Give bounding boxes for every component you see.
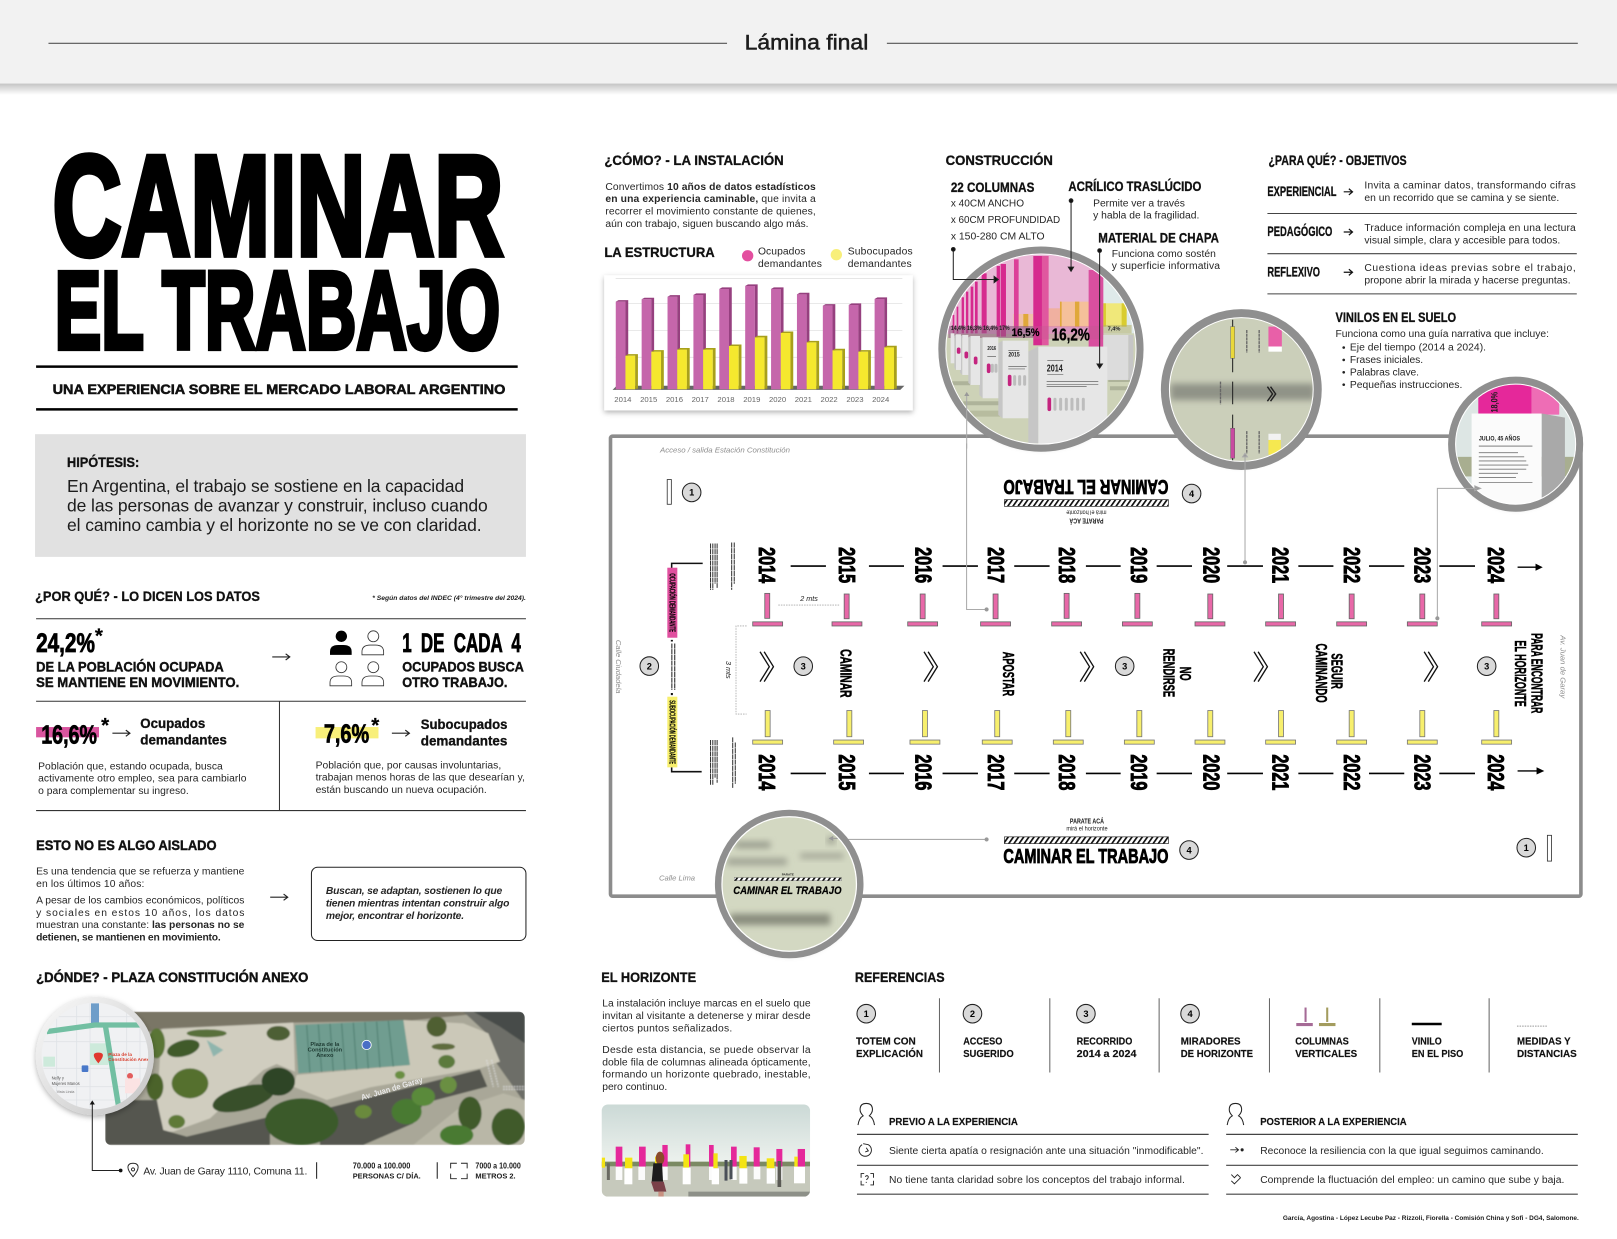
chart year labels: 2020: [769, 395, 786, 404]
mirador top: [1003, 475, 1168, 526]
stat: 24,2%: SE MANTIENE EN MOVIMIENTO.: [36, 675, 239, 690]
stat: metros: METROS 2.: [475, 1172, 516, 1181]
chart year labels: 2021: [795, 395, 812, 404]
chart year labels: 2019: [743, 395, 760, 404]
chart year labels: 2014: [614, 395, 632, 404]
heading: estructura: LA ESTRUCTURA: [604, 245, 715, 260]
stat: 7,6% subocupados: Subocupados: [421, 717, 507, 732]
measure: 3 mts: 3 mts: [724, 661, 733, 679]
panel: como: [604, 153, 913, 410]
panel: posterior: Reconoce la resiliencia con la que igual seguimos caminando.: [1260, 1146, 1544, 1157]
timeline top: years: 2020: [1198, 547, 1224, 583]
mirador bottom: PARATE ACÁ: [1070, 816, 1104, 825]
keywords: EL HORIZONTE: [1511, 640, 1528, 707]
circle: horizon mark detail: PARATE: [782, 873, 794, 877]
heading: referencias: REFERENCIAS: [855, 970, 945, 985]
panel: el horizonte: pero continuo.: [602, 1082, 667, 1093]
panel: esto no es algo aislado: en los últimos 10 años:: [36, 879, 144, 890]
stat: 16,6% ocupados: activamente otro empleo, sea para cambiarlo: [38, 774, 247, 785]
ref 4: [1181, 1004, 1253, 1060]
street label: estacion: Acceso / salida Estación Constitución: [659, 446, 790, 455]
panel: esto no es algo aislado: Es una tendencia que se refuerza y mantiene: [36, 867, 245, 878]
ref 7: measures: DISTANCIAS: [1517, 1049, 1577, 1060]
panel: el horizonte: La instalación incluye marcas en el suelo que: [602, 999, 811, 1010]
panel: vinilos: Eje del tiempo (2014 a 2024).: [1350, 343, 1486, 354]
left bracket: data strips: OCUPACIÓN DEMANDANTE: [667, 573, 678, 632]
text: acrilico: ACRÍLICO TRASLÚCIDO: [1068, 179, 1201, 194]
stat: personas: [353, 1161, 421, 1181]
marker 3 b: 3: [1122, 661, 1127, 671]
circle: columns render: 2016: [987, 346, 996, 352]
panel: vinilos: Pequeñas instrucciones.: [1350, 380, 1462, 391]
panel: esto no es algo aislado: A pesar de los cambios económicos, políticos: [36, 895, 244, 906]
stat: 7,6% subocupados: *: [371, 714, 379, 737]
aerial photo: Plaza de la: [310, 1042, 340, 1048]
marker 1 bottom: 1: [1524, 843, 1529, 853]
icon: four people: [330, 631, 384, 686]
ref 2: SUGERIDO: [963, 1049, 1014, 1060]
bar chart: [604, 275, 913, 410]
stat: 16,6% ocupados: 16,6%: [41, 722, 97, 750]
ref 6: vinyl: [1412, 1024, 1464, 1060]
pink and white rear columns: [616, 1144, 805, 1167]
timeline bottom: years: 2018: [1054, 754, 1080, 790]
stat: 7,6% subocupados: Población que, por causas involuntarias,: [316, 760, 501, 771]
map circle: Plaza de la: [108, 1052, 132, 1057]
far blocks: [954, 334, 1133, 443]
panel: vinilos: VINILOS EN EL SUELO: [1335, 310, 1456, 325]
map circle: Nelly y: [52, 1076, 65, 1081]
panel: hipotesis: En Argentina, el trabajo se sostiene en la capacidad: [67, 476, 464, 496]
heading: por que: ¿POR QUÉ? - LO DICEN LOS DATOS: [35, 589, 260, 604]
row: pedagogico: PEDAGÓGICO: [1267, 224, 1332, 239]
panel: construccion: [946, 153, 1220, 272]
ref 4: 4: [1187, 1009, 1193, 1019]
panel: el horizonte: ciertos puntos señalizados.: [602, 1023, 732, 1034]
panel: esto no es algo aislado: detienen, se mantienen en movimiento.: [36, 933, 221, 944]
text: chapa: [1098, 230, 1220, 272]
row: reflexivo: [1267, 263, 1576, 287]
chevrons: [760, 652, 1438, 682]
mirador bottom: mirá el horizonte: [1066, 826, 1108, 833]
callout: [311, 867, 526, 941]
heading: donde: ¿DÓNDE? - PLAZA CONSTITUCIÓN ANEXO: [36, 970, 308, 985]
icon: pin: [128, 1163, 138, 1177]
ref 3: 3: [1083, 1009, 1088, 1019]
callout: mejor, encontrar el horizonte.: [326, 911, 464, 922]
text: columnas: x 60CM PROFUNDIDAD: [951, 215, 1060, 226]
stat: 1 de cada 4: 1 DE CADA 4: [402, 628, 521, 658]
keywords: APOSTAR: [999, 652, 1016, 696]
ref 1: 1: [864, 1009, 869, 1019]
circle: totem detail: [1449, 380, 1583, 514]
panel: el horizonte: invitan al visitante a detenerse y mirar desde: [602, 1011, 811, 1022]
panel: esto no es algo aislado: [36, 838, 526, 944]
ref 2: [963, 1004, 1014, 1060]
marker 1 bottom: [1517, 838, 1536, 857]
circle: columns render: [937, 199, 1143, 453]
marker 3 c: 3: [1484, 661, 1489, 671]
panel: como: Convertimos 10 años de datos estadísticos: [605, 182, 816, 193]
stat: 1 de cada 4: OTRO TRABAJO.: [402, 675, 507, 690]
title: [36, 127, 518, 409]
row: pedagogico: [1267, 223, 1576, 246]
measure: 2 mts: 2 mts: [799, 594, 818, 603]
heading: como: ¿CÓMO? - LA INSTALACIÓN: [604, 153, 784, 168]
panel: donde: [36, 970, 525, 1181]
aerial photo: Av. Juan de Garay: [360, 1075, 424, 1102]
timeline bottom: years: 2020: [1198, 754, 1224, 790]
timeline top: years: 2024: [1483, 547, 1509, 583]
panel: referencias: [855, 970, 1577, 1073]
aerial photo: [105, 1012, 525, 1145]
ref 3: RECORRIDO: [1077, 1037, 1133, 1048]
map circle: [36, 997, 154, 1115]
text: columnas: [951, 180, 1060, 242]
ref 7: measures: MEDIDAS Y: [1517, 1037, 1571, 1048]
plan: floor plan frame: [610, 436, 1581, 896]
chart year labels: 2022: [821, 395, 838, 404]
timeline top: years: 2014: [754, 547, 780, 583]
subtitle: UNA EXPERIENCIA SOBRE EL MERCADO LABORAL ARGENTINO: [53, 382, 505, 397]
panel: posterior: POSTERIOR A LA EXPERIENCIA: [1260, 1117, 1407, 1128]
icon: fluctuation: [1231, 1175, 1241, 1184]
marker 3 a: [794, 657, 813, 675]
timeline top: years: 2017: [983, 547, 1009, 583]
marker 3 c: [1477, 657, 1496, 675]
left bracket: data strips: [667, 542, 735, 788]
circle: totem detail: JULIO, 45 AÑOS: [1479, 433, 1520, 442]
keywords: [836, 633, 1545, 713]
marker 3 a: 3: [801, 661, 806, 671]
measure: 3 mts: [724, 626, 747, 714]
stat: personas: PERSONAS C/ DÍA.: [353, 1172, 421, 1181]
circle: floor vinyl detail: [1160, 309, 1325, 474]
text: chapa: y superficie informativa: [1112, 261, 1220, 272]
timeline top: years: 2015: [834, 547, 860, 583]
heading: aislado: ESTO NO ES ALGO AISLADO: [36, 838, 217, 853]
panel: posterior: Comprende la fluctuación del empleo: un camino que sube y baja.: [1260, 1175, 1564, 1186]
timeline top: years: 2022: [1339, 547, 1365, 583]
circle: totem detail: 18,0%: [1489, 392, 1499, 413]
ref 5: columns: COLUMNAS: [1295, 1037, 1349, 1048]
circle: columns render: 16,2%: [1052, 325, 1090, 345]
chart year labels: 2023: [846, 395, 863, 404]
timeline bottom: years: 2021: [1267, 754, 1293, 790]
credits: García, Agostina - López Lecube Paz - Rizzoli, Fiorella - Comisión China y Sofi - DG4, Salomone.: [1283, 1215, 1579, 1222]
text: columnas: 22 COLUMNAS: [951, 180, 1034, 195]
timeline bottom: years: 2016: [911, 754, 937, 790]
panel: como: recorrer el movimiento constante de quienes,: [605, 207, 816, 218]
map circle: Mujeres Manos: [52, 1081, 80, 1086]
heading: construccion: CONSTRUCCIÓN: [946, 153, 1053, 168]
legend: demandantes: [848, 259, 912, 270]
keywords: PARA ENCONTRAR: [1528, 633, 1545, 713]
stat: 16,6% ocupados: *: [101, 714, 109, 737]
panel: objetivos: [1267, 153, 1577, 294]
stat: 7,6% subocupados: están buscando un nueva ocupación.: [316, 785, 487, 796]
legend: Subocupados: [848, 247, 913, 258]
ref 4: MIRADORES: [1181, 1037, 1241, 1048]
text: columnas: x 40CM ANCHO: [951, 198, 1024, 209]
panel: hipotesis: de las personas de avanzar y construir, incluso cuando: [67, 496, 488, 516]
icon: resignation: [859, 1144, 871, 1156]
circle: columns render: 14,4% 16,3% 16,4% 17%: [951, 325, 1010, 332]
row: experiencial: EXPERIENCIAL: [1267, 184, 1336, 199]
timeline bottom: years: 2023: [1409, 754, 1435, 790]
panel: posterior: [1226, 1103, 1578, 1194]
marker 2: [640, 657, 659, 675]
leader from vinyl circle: [1243, 453, 1247, 470]
panel: previo: [857, 1103, 1209, 1194]
circle: horizon mark detail: [717, 810, 861, 959]
stat: 16,6% ocupados: Población que, estando ocupada, busca: [38, 761, 223, 772]
timeline bottom: years: 2024: [1483, 754, 1509, 791]
mirador top: CAMINAR EL TRABAJO: [1003, 475, 1168, 498]
stat: 24,2%: 24,2%: [36, 628, 95, 658]
panel: previo: PREVIO A LA EXPERIENCIA: [889, 1117, 1018, 1128]
map circle: Constitución Anexo: [108, 1057, 152, 1062]
marker 4 bottom: [1180, 841, 1198, 859]
stat: metros: [475, 1161, 521, 1181]
timeline top: years: 2018: [1054, 547, 1080, 583]
leader from circle to plan: [966, 395, 968, 449]
timeline bottom: years: [754, 754, 1544, 791]
row: reflexivo: REFLEXIVO: [1267, 264, 1320, 279]
timeline top: years: 2019: [1126, 547, 1152, 583]
circle: columns render: 16,5%: [1012, 327, 1040, 339]
stat: 1 de cada 4: OCUPADOS BUSCA: [402, 659, 524, 674]
stat: 16,6% ocupados: [36, 714, 247, 797]
people: [656, 1152, 664, 1165]
ref 1: EXPLICACIÓN: [856, 1048, 923, 1060]
ref 2: 2: [970, 1009, 975, 1019]
ref 7: measures: [1517, 1026, 1577, 1060]
callout: tienen mientras intentan construir algo: [326, 898, 509, 909]
panel: vinilos: Frases iniciales.: [1350, 355, 1423, 366]
circle: columns render: 2014: [1047, 364, 1063, 375]
icon: question: [861, 1174, 873, 1185]
chart year labels: 2015: [640, 395, 657, 404]
timeline bottom: years: 2015: [834, 754, 860, 790]
panel: el horizonte: Desde esta distancia, se puede observar la: [602, 1045, 811, 1056]
panel: vinilos: [1335, 310, 1549, 391]
panel: hipotesis: HIPÓTESIS:: [67, 455, 139, 470]
aerial photo: Anexo: [316, 1053, 334, 1059]
timeline top: years: 2021: [1267, 547, 1293, 583]
legend: demandantes: [758, 259, 822, 270]
stat: metros: 7000 a 10.000: [475, 1161, 521, 1170]
chart year labels: 2024: [872, 395, 890, 404]
stat: 7,6% subocupados: [316, 714, 525, 796]
text: acrilico: [1068, 179, 1201, 222]
panel: previo: Siente cierta apatía o resignación ante una situación "inmodificable".: [889, 1146, 1203, 1157]
title: EL TRABAJO: [55, 250, 500, 373]
icon: forward: [1230, 1147, 1244, 1152]
ref 1: [856, 1004, 923, 1060]
legend: Ocupados: [758, 247, 805, 258]
icon: person outline: [1227, 1103, 1244, 1125]
arrow: [270, 894, 288, 900]
keywords: CAMINANDO: [1312, 644, 1329, 703]
street label: garay: Av. Juan de Garay: [1558, 634, 1567, 699]
legend: [742, 247, 913, 270]
marker 4 bottom: 4: [1186, 845, 1192, 855]
row: reflexivo: Cuestiona ideas previas sobre el trabajo,: [1364, 263, 1576, 274]
measure: 2 mts: [778, 594, 840, 605]
text: acrilico: y habla de la fragilidad.: [1093, 211, 1199, 222]
panel: vinilos: Funciona como una guía narrativa que incluye:: [1335, 329, 1549, 340]
mirador bottom: CAMINAR EL TRABAJO: [1003, 845, 1168, 868]
row: experiencial: en un recorrido que se camina y se siente.: [1364, 193, 1559, 204]
bars: ocupados: [616, 284, 887, 389]
marker 1 top: 1: [689, 488, 694, 498]
panel: esto no es algo aislado: muestran una constante: las personas no se: [36, 920, 245, 931]
map circle: Vista Linda: [57, 1090, 74, 1094]
totem bottom: [1547, 835, 1552, 861]
marker 2: 2: [647, 661, 652, 671]
panel: como: en una experiencia caminable, que invita a: [605, 194, 816, 205]
address: Av. Juan de Garay 1110, Comuna 11.: [143, 1167, 307, 1178]
callout: Buscan, se adaptan, sostienen lo que: [326, 886, 502, 897]
keywords: SEGUIR: [1328, 653, 1345, 689]
row: pedagogico: Traduce información compleja en una lectura: [1364, 223, 1576, 234]
stat: 7,6% subocupados: demandantes: [421, 734, 507, 749]
mirador top: PARATE ACÁ: [1069, 517, 1103, 526]
stat: 24,2%: DE LA POBLACIÓN OCUPADA: [36, 659, 224, 674]
ref 3: [1077, 1004, 1137, 1060]
street label: ciudadela: Calle Ciudadela: [614, 640, 623, 694]
stat: 24,2%: [36, 624, 239, 690]
timeline top: years: [754, 547, 1543, 583]
circle: columns render: 7,4%: [1108, 327, 1120, 333]
panel: esto no es algo aislado: y sociales en estos 10 años, los datos: [36, 908, 244, 919]
columns: ocupados: [753, 593, 1512, 626]
circle: horizon mark detail: CAMINAR EL TRABAJO: [733, 885, 842, 897]
stat: 16,6% ocupados: Ocupados: [140, 716, 205, 731]
ref 5: columns: [1295, 1008, 1358, 1060]
heading: horizonte: EL HORIZONTE: [601, 970, 696, 985]
photo: horizon render: [601, 1104, 811, 1197]
timeline top: years: 2016: [911, 547, 937, 583]
panel: previo: No tiene tanta claridad sobre los conceptos del trabajo informal.: [889, 1175, 1185, 1186]
keywords: NO: [1176, 667, 1193, 681]
stat: 1 de cada 4: [402, 628, 524, 690]
street label: lima: Calle Lima: [659, 874, 696, 883]
footnote: * Según datos del INDEC (4° trimestre del 2024).: [372, 594, 526, 602]
mirador bottom: [1003, 816, 1168, 868]
marker 3 b: [1115, 657, 1134, 675]
panel: el horizonte: doble fila de columnas alineada ópticamente,: [602, 1057, 811, 1068]
text: chapa: MATERIAL DE CHAPA: [1098, 230, 1219, 245]
header band: Lámina final: [745, 30, 868, 55]
ref 5: columns: VERTICALES: [1295, 1049, 1358, 1060]
panel: como: aún con trabajo, siguen buscando algo más.: [605, 219, 809, 230]
icon: person outline: [858, 1103, 874, 1125]
panel: hipotesis: el camino cambia y el horizonte no se ve con claridad.: [67, 515, 482, 535]
ref 2: ACCESO: [963, 1037, 1003, 1048]
chart year labels: 2016: [666, 395, 683, 404]
leader lines: [830, 443, 1479, 842]
mirador top: mirá el horizonte: [1066, 508, 1107, 515]
timeline top: years: 2023: [1409, 547, 1435, 583]
panel: por que: [35, 589, 526, 811]
icon: area: [451, 1163, 467, 1179]
marker 4 top: [1182, 484, 1201, 503]
ref 6: vinyl: EN EL PISO: [1412, 1049, 1464, 1060]
timeline bottom: years: 2017: [983, 754, 1009, 790]
stat: 7,6% subocupados: trabajan menos horas de las que desearían y,: [316, 773, 525, 784]
bars: subocupados: [625, 331, 897, 389]
circle: columns render: 2015: [1008, 352, 1020, 359]
text: columnas: x 150-280 CM ALTO: [951, 231, 1045, 242]
ref 6: vinyl: VINILO: [1412, 1037, 1442, 1048]
chart year labels: 2018: [717, 395, 735, 404]
stat: personas: 70.000 a 100.000: [353, 1161, 411, 1170]
address leader: [92, 1103, 120, 1170]
timeline bottom: years: 2022: [1339, 754, 1365, 790]
chart year labels: [614, 395, 890, 404]
leader arrows: construction: [951, 199, 1102, 396]
marker 4 top: 4: [1189, 489, 1195, 499]
keywords: CAMINAR: [836, 649, 853, 698]
arrow: [272, 654, 290, 660]
keywords: RENDIRSE: [1160, 649, 1177, 697]
title: CAMINAR: [53, 127, 503, 286]
row: experiencial: Invita a caminar datos, transformando cifras: [1364, 181, 1576, 192]
ref 4: DE HORIZONTE: [1181, 1049, 1253, 1060]
stat: 7,6% subocupados: 7,6%: [324, 721, 369, 749]
stat: 24,2%: *: [95, 624, 103, 647]
columns: subocupados: [753, 711, 1512, 744]
ref 1: TOTEM CON: [856, 1037, 916, 1048]
panel: vinilos: Palabras clave.: [1350, 367, 1419, 378]
panel: el horizonte: [601, 970, 811, 1197]
row: pedagogico: visual simple, clara y accesible para todos.: [1364, 235, 1560, 246]
heading: objetivos: ¿PARA QUÉ? - OBJETIVOS: [1268, 153, 1407, 168]
panel: hipotesis: [35, 434, 526, 557]
stat: 16,6% ocupados: o para complementar su ingreso.: [38, 786, 189, 797]
ref 3: 2014 a 2024: [1077, 1049, 1137, 1060]
row: experiencial: [1267, 181, 1576, 204]
marker 1 top: [682, 483, 701, 502]
aerial photo: Constitución: [308, 1048, 343, 1054]
left bracket: data strips: SUBOCUPACIÓN DEMANDANTE: [667, 700, 678, 764]
header band: [0, 0, 1617, 95]
text: acrilico: Permite ver a través: [1093, 198, 1185, 209]
row: reflexivo: propone abrir la mirada y hacerse preguntas.: [1364, 276, 1571, 287]
totem top: [667, 480, 671, 504]
timeline bottom: years: 2019: [1126, 754, 1152, 790]
text: chapa: Funciona como sostén: [1112, 249, 1216, 260]
panel: el horizonte: formando un horizonte quebrado, inestable,: [602, 1070, 811, 1081]
timeline bottom: years: 2014: [754, 754, 780, 791]
stat: 16,6% ocupados: demandantes: [140, 733, 227, 748]
chart year labels: 2017: [692, 395, 709, 404]
